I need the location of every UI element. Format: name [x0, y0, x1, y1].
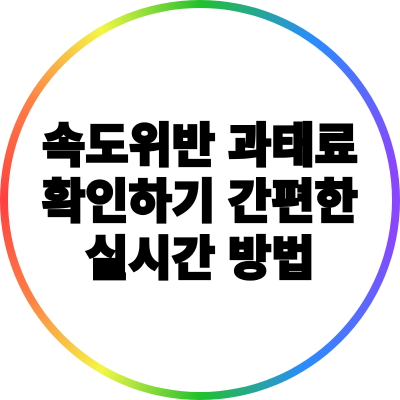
- title line 3: 실시간 방법: [85, 232, 315, 285]
- title line 1: 속도위반 과태료: [42, 119, 358, 172]
- title line 2: 확인하기 간편한: [42, 175, 358, 228]
